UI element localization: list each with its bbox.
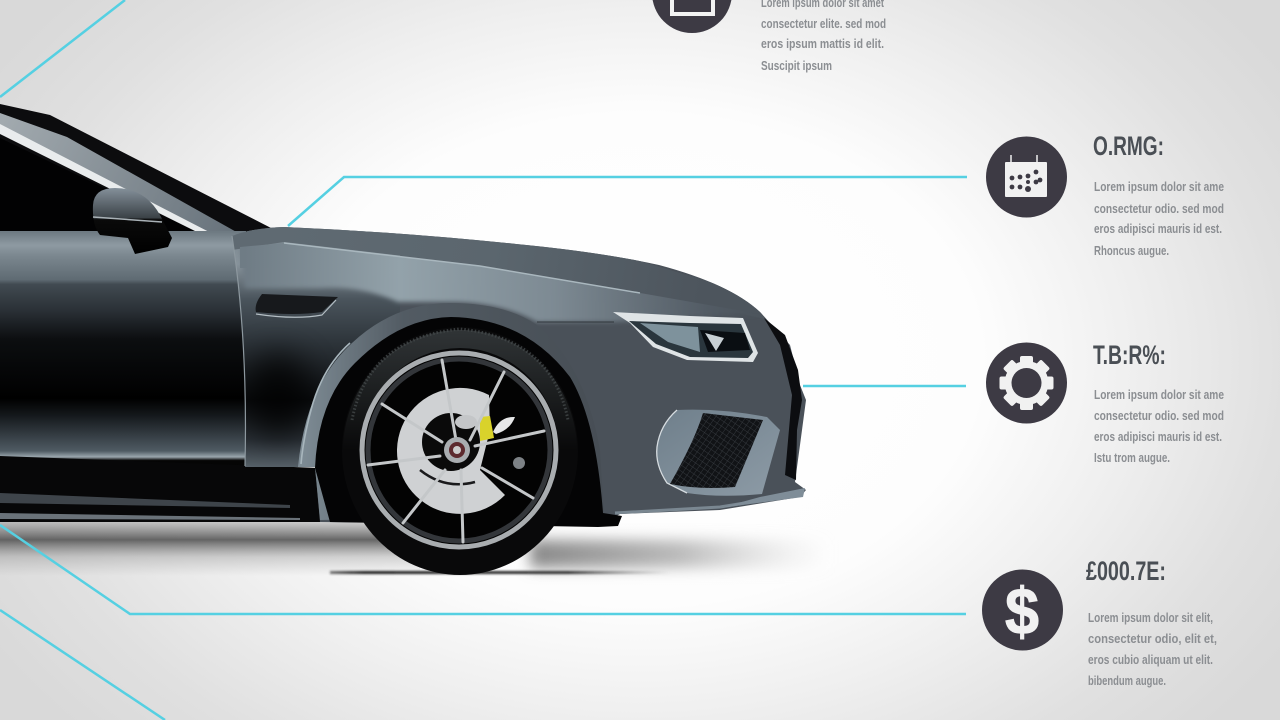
tyre <box>342 327 578 575</box>
feature: price <box>982 556 1221 688</box>
text block: gear: Lorem ipsum dolor sit ame <box>1094 387 1224 402</box>
fender dark core <box>244 353 312 437</box>
door panel <box>0 231 246 471</box>
rim <box>362 353 556 547</box>
icon: calendar <box>986 136 1067 218</box>
hub badge <box>444 437 470 463</box>
wheel arch lip <box>298 303 604 520</box>
bumper seam <box>537 322 614 323</box>
front wheel <box>342 327 578 575</box>
connector lines <box>0 0 967 720</box>
caliper <box>480 416 525 469</box>
text block: top: consectetur elite. sed mod <box>761 16 886 31</box>
feature: calendar <box>986 131 1228 258</box>
text block: calendar: eros adipisci mauris id est. <box>1094 221 1222 236</box>
ground shadow <box>0 522 830 576</box>
sill <box>0 456 345 522</box>
bumper lower edge <box>615 502 743 514</box>
brake disc <box>397 388 505 514</box>
text block: price: consectetur odio, elit et, <box>1088 631 1217 646</box>
text block: gear: eros adipisci mauris id est. <box>1094 429 1222 444</box>
text block: top: Suscipit ipsum <box>761 58 832 73</box>
text block: price: Lorem ipsum dolor sit elit, <box>1088 610 1213 625</box>
text block: calendar: consectetur odio. sed mod <box>1094 201 1224 216</box>
hood crease <box>284 243 640 293</box>
text block: gear: Istu trom augue. <box>1094 450 1170 465</box>
headlight <box>613 312 758 362</box>
text block: calendar: Lorem ipsum dolor sit ame <box>1094 179 1224 194</box>
text block: top: eros ipsum mattis id elit. <box>761 36 884 51</box>
icon: gear <box>986 342 1067 424</box>
text block: price: bibendum augue. <box>1088 673 1166 688</box>
spokes <box>368 360 544 542</box>
side vent <box>256 294 338 317</box>
text block: price: eros cubio aliquam ut elit. <box>1088 652 1213 667</box>
wheel arch interior <box>315 317 622 527</box>
heading: calendar: O.RMG: <box>1093 131 1164 161</box>
car <box>0 104 830 575</box>
fender shading <box>230 230 400 475</box>
text block: calendar: Rhoncus augue. <box>1094 243 1169 258</box>
disc inner ring <box>420 470 475 484</box>
hood upper panel <box>232 225 770 320</box>
feature: gear <box>986 340 1228 465</box>
hood lower panel <box>240 244 704 306</box>
text block: gear: consectetur odio. sed mod <box>1094 408 1224 423</box>
icon: square badge <box>652 0 732 33</box>
feature: top <box>652 0 890 73</box>
door seam <box>232 236 245 466</box>
icon: dollar: $ <box>1005 574 1039 648</box>
air intake <box>657 410 805 508</box>
wing mirror <box>93 188 172 254</box>
heading: price: £000.7E: <box>1086 556 1166 586</box>
nose body: hood, fender and bumper <box>232 227 806 522</box>
hood soft lower edge <box>242 256 722 324</box>
lip highlight <box>301 343 350 464</box>
icon: dollar <box>982 570 1063 650</box>
heading: gear: T.B:R%: <box>1093 340 1166 370</box>
roof and window frame <box>0 104 273 240</box>
front grille edge <box>764 318 802 480</box>
